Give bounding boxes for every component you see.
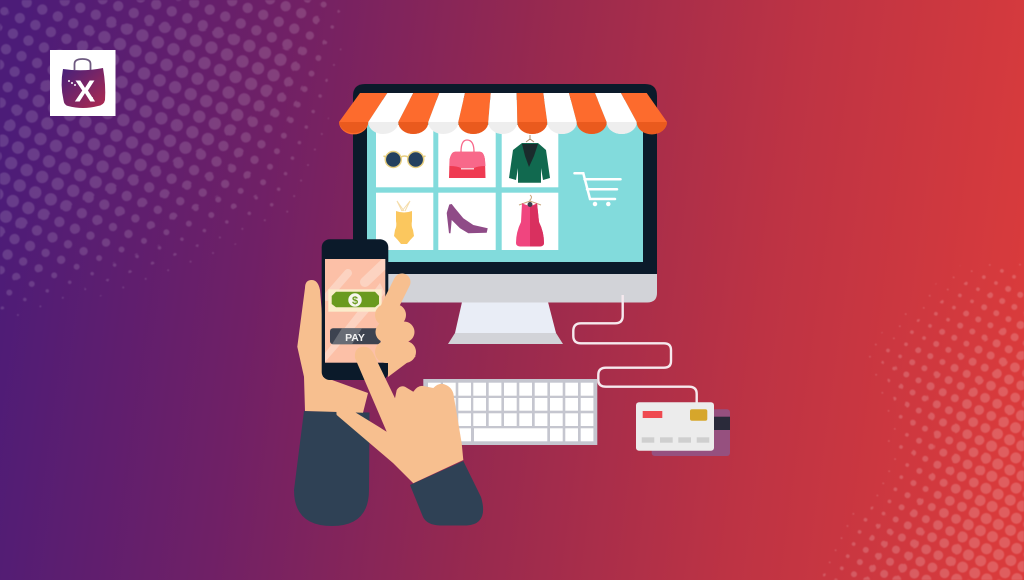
keyboard [423, 379, 597, 445]
monitor [353, 84, 657, 344]
smartphone [322, 239, 388, 380]
icon: swimsuit [394, 201, 414, 244]
banknote: $ [352, 295, 358, 307]
icon: handbag [449, 140, 486, 178]
credit cards [636, 402, 730, 456]
pay button [330, 328, 381, 344]
cable [573, 295, 697, 403]
right sleeve [410, 461, 483, 526]
monitor bezel [353, 84, 657, 274]
right hand pointing [336, 347, 463, 483]
back card [652, 409, 730, 456]
icon: sunglasses [384, 152, 426, 168]
front card [636, 402, 714, 451]
icon: dress on hanger [516, 195, 544, 246]
left sleeve [294, 411, 370, 526]
logo: X [75, 74, 96, 109]
left hand palm [297, 280, 368, 413]
banknote [328, 289, 382, 312]
monitor chin [353, 274, 657, 302]
monitor stand base [448, 333, 563, 344]
icon: high heel [447, 204, 488, 233]
left hand fingers [386, 282, 416, 377]
icon: shopping cart [574, 173, 620, 205]
awning [339, 93, 667, 134]
phone screen [325, 259, 385, 363]
halftone dots: top left [0, 0, 345, 320]
pay button: PAY [345, 332, 365, 344]
logo [50, 50, 116, 116]
product tiles [376, 125, 558, 250]
icon: blazer on hanger [509, 135, 550, 183]
monitor stand [455, 302, 556, 333]
halftone dots: bottom right [805, 262, 1024, 580]
monitor screen [367, 100, 643, 262]
